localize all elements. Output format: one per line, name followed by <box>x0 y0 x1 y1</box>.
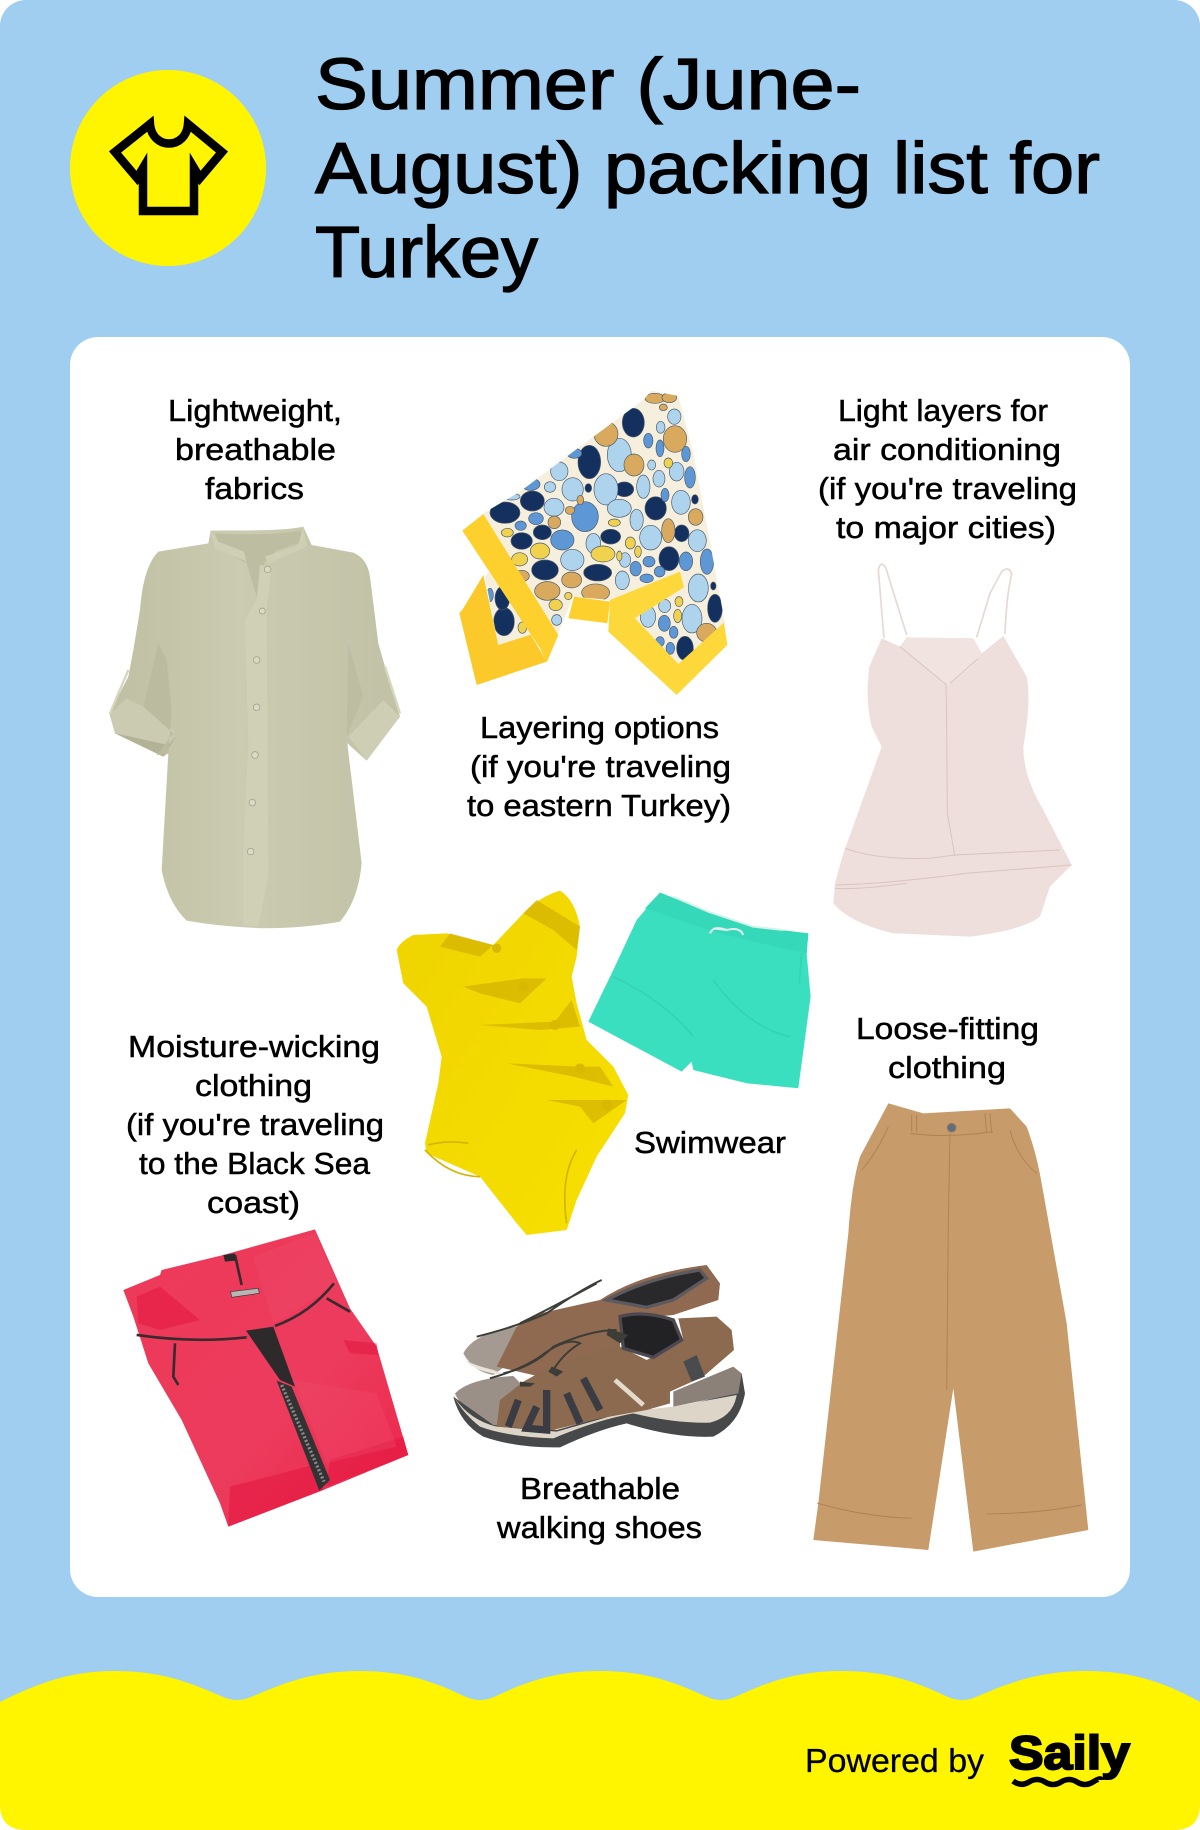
panel: packing list card <box>70 337 1130 1597</box>
photo: brown walking sandals <box>453 1265 745 1447</box>
label: moisture-wicking clothing: clothing <box>195 1068 312 1103</box>
label: light layers: air conditioning <box>833 432 1061 467</box>
photo: beige linen shirt <box>109 527 400 928</box>
label: loose-fitting clothing: clothing <box>888 1050 1006 1085</box>
label: moisture-wicking clothing: (if you're traveling <box>126 1107 384 1142</box>
label: breathable walking shoes: Breathable <box>520 1471 680 1506</box>
photo: tan wide-leg trousers <box>813 1103 1088 1552</box>
title <box>315 45 1100 293</box>
footer: powered by Saily: Powered by <box>805 1742 985 1779</box>
photo: red folded jacket <box>123 1229 408 1527</box>
photo: turquoise swim shorts <box>588 893 811 1088</box>
label: layering options: to eastern Turkey) <box>467 788 731 823</box>
label: moisture-wicking clothing: Moisture-wicking <box>128 1029 380 1064</box>
label: moisture-wicking clothing: to the Black Sea <box>139 1146 371 1181</box>
photo: patterned yellow scarf <box>459 391 727 695</box>
label: light layers: to major cities) <box>836 510 1056 545</box>
title: Summer (June- <box>315 45 861 125</box>
label: layering options: (if you're traveling <box>470 749 731 784</box>
label: loose-fitting clothing <box>856 1011 1039 1085</box>
label: moisture-wicking clothing <box>126 1029 384 1220</box>
photo: yellow one-piece swimsuit <box>397 891 628 1235</box>
logo: Saily: Saily <box>1009 1726 1130 1779</box>
label: light layers: Light layers for <box>838 393 1048 428</box>
title: August) packing list for <box>315 129 1100 209</box>
label: loose-fitting clothing: Loose-fitting <box>856 1011 1039 1046</box>
label: swimwear: Swimwear <box>634 1125 786 1160</box>
label: light layers <box>818 393 1077 545</box>
label: light layers: (if you're traveling <box>818 471 1077 506</box>
label: layering options: Layering options <box>480 710 719 745</box>
label: layering options <box>467 710 731 823</box>
label: lightweight fabrics: fabrics <box>205 471 304 506</box>
label: lightweight fabrics <box>168 393 342 506</box>
label: lightweight fabrics: Lightweight, <box>168 393 342 428</box>
header icon: t-shirt in yellow circle <box>70 70 266 266</box>
photo: pale pink camisole <box>833 564 1072 937</box>
footer wave band <box>0 1671 1200 1830</box>
label: breathable walking shoes <box>496 1471 702 1545</box>
label: breathable walking shoes: walking shoes <box>496 1510 702 1545</box>
label: moisture-wicking clothing: coast) <box>207 1185 300 1220</box>
label: lightweight fabrics: breathable <box>175 432 336 467</box>
title: Turkey <box>315 213 538 293</box>
footer: powered by Saily <box>805 1726 1130 1784</box>
